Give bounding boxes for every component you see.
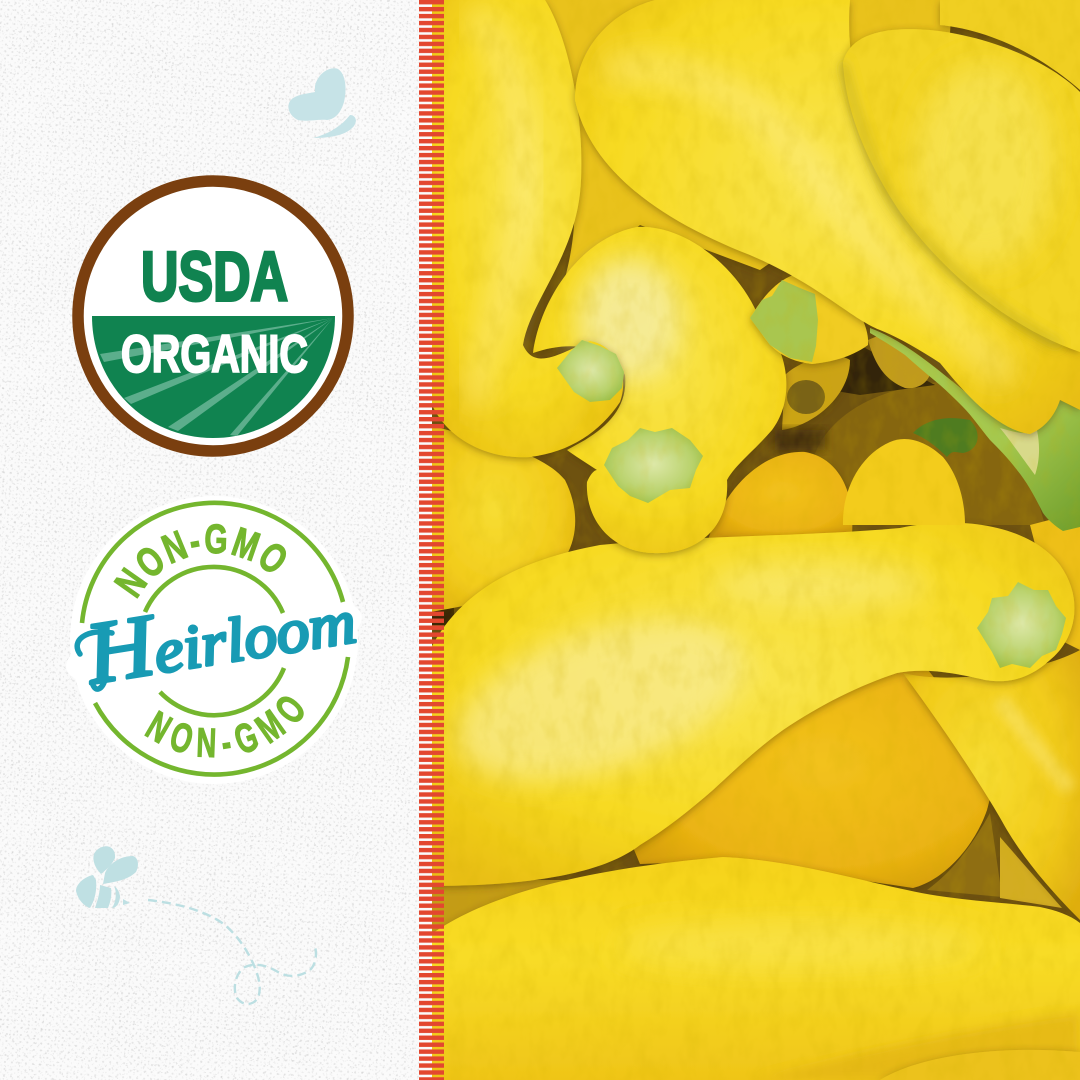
stem cap: top left squash (557, 340, 624, 402)
squash: centre bulb with blossom end (533, 227, 786, 553)
white sticker backing (59, 496, 369, 784)
panel: linen fabric background (0, 0, 419, 1080)
squash: small with green stem (843, 418, 978, 525)
icon: butterfly (288, 68, 356, 138)
squash: top left with curved neck (430, 0, 624, 457)
badge: Heirloom Non-GMO seal (66, 496, 362, 784)
seal text: NON-GMO curved: NON-GMO (144, 696, 304, 758)
squash: lower right diagonal (903, 650, 1080, 920)
seal ring (78, 181, 348, 451)
stem: green ridge to lower right (870, 328, 1080, 531)
badge: USDA Organic seal (72, 175, 354, 457)
squash: large crookneck (430, 523, 1074, 886)
squash: far right shaded pieces (430, 512, 1080, 940)
blossom end cap: crookneck (977, 582, 1066, 668)
blossom end cap (604, 428, 703, 503)
seal text: NON-GMO curved (113, 524, 304, 758)
squash: neck with green stem (750, 272, 868, 364)
squash: top right (843, 0, 1080, 352)
squash: small shaded with brown end (782, 356, 850, 430)
squash: large orange behind crookneck (630, 660, 1000, 888)
seal text: USDA: USDA (141, 238, 288, 316)
squash: bottom long (430, 857, 1080, 1080)
dark gap below centre (775, 430, 825, 450)
seal field: green half circle (92, 316, 335, 438)
squash: lower left bulb (430, 425, 575, 612)
icon: bee with dashed flight path (76, 846, 318, 1005)
swash on Heirloom capital (77, 632, 112, 689)
squash: upper back row (540, 0, 951, 290)
squash: large diagonal top (575, 0, 1080, 434)
squash: bottom right tip (880, 1050, 1080, 1080)
photo: pile of yellow crookneck squash (432, 0, 1080, 1080)
squash: mid centre orange (708, 452, 852, 540)
seal text: Heirloom script: Heirloom (78, 565, 361, 704)
seal rings: green arcs (82, 503, 348, 775)
stripe border: red vertical divider (419, 0, 444, 1080)
seal text: NON-GMO curved: NON-GMO (113, 524, 286, 599)
squash: shaded olive right of centre (810, 335, 1045, 525)
